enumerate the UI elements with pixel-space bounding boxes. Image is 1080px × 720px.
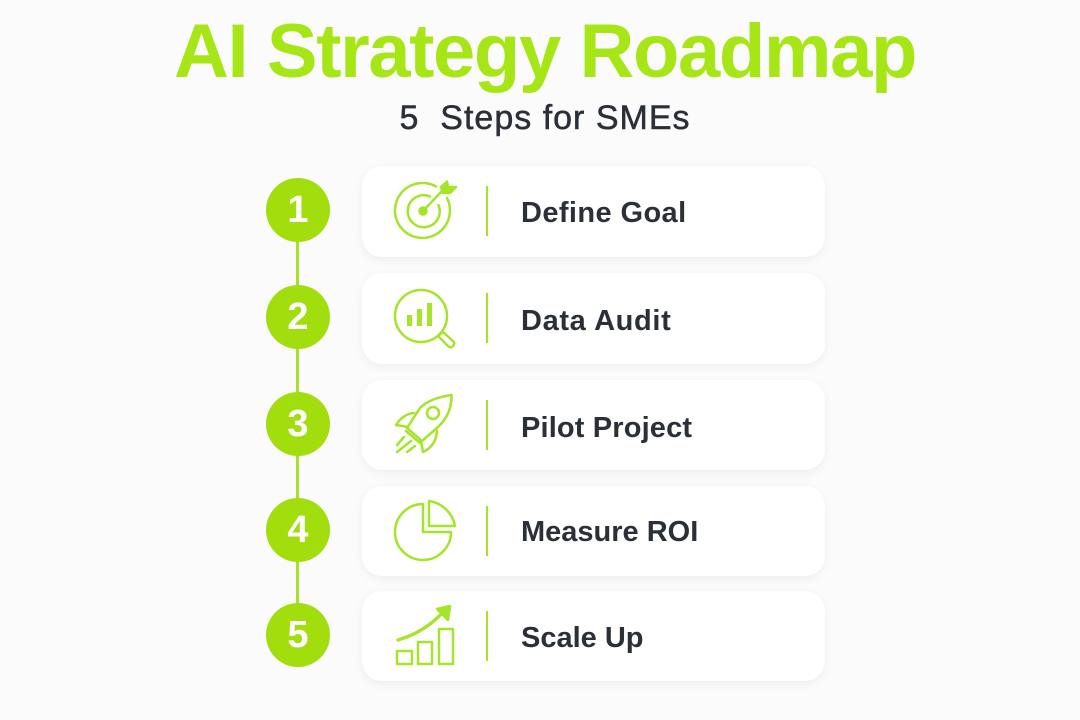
label: Measure ROI xyxy=(521,516,698,548)
step 3 number: 3 xyxy=(287,403,309,445)
label: Data Audit xyxy=(521,305,671,337)
icon: growth bars xyxy=(396,604,454,666)
step 2 number xyxy=(266,285,330,349)
subtitle: 5 Steps for SMEs xyxy=(400,99,690,137)
label: Define Goal xyxy=(521,197,687,229)
step 2 number: 2 xyxy=(287,296,309,338)
panel: Pilot Project xyxy=(362,380,825,470)
step 1 number: 1 xyxy=(287,189,309,231)
divider xyxy=(486,611,488,661)
step 5 number xyxy=(266,603,330,667)
step 1 number xyxy=(266,178,330,242)
step 3 number xyxy=(266,392,330,456)
label: Pilot Project xyxy=(521,412,692,444)
divider xyxy=(486,400,488,450)
divider xyxy=(486,186,488,236)
icon: target xyxy=(394,180,458,240)
panel: Scale Up xyxy=(362,591,825,681)
timeline connector xyxy=(296,230,299,620)
divider xyxy=(486,293,488,343)
step 4 number xyxy=(266,498,330,562)
title: AI Strategy Roadmap xyxy=(174,9,916,94)
icon: rocket xyxy=(394,394,453,454)
panel: Measure ROI xyxy=(362,486,825,576)
step 5 number: 5 xyxy=(287,614,309,656)
label: Scale Up xyxy=(521,622,644,654)
step 4 number: 4 xyxy=(287,509,309,551)
panel: Define Goal xyxy=(362,166,825,257)
icon: magnifier with bars xyxy=(394,288,456,349)
divider xyxy=(486,506,488,556)
panel: Data Audit xyxy=(362,273,825,364)
icon: pie chart xyxy=(394,500,456,562)
